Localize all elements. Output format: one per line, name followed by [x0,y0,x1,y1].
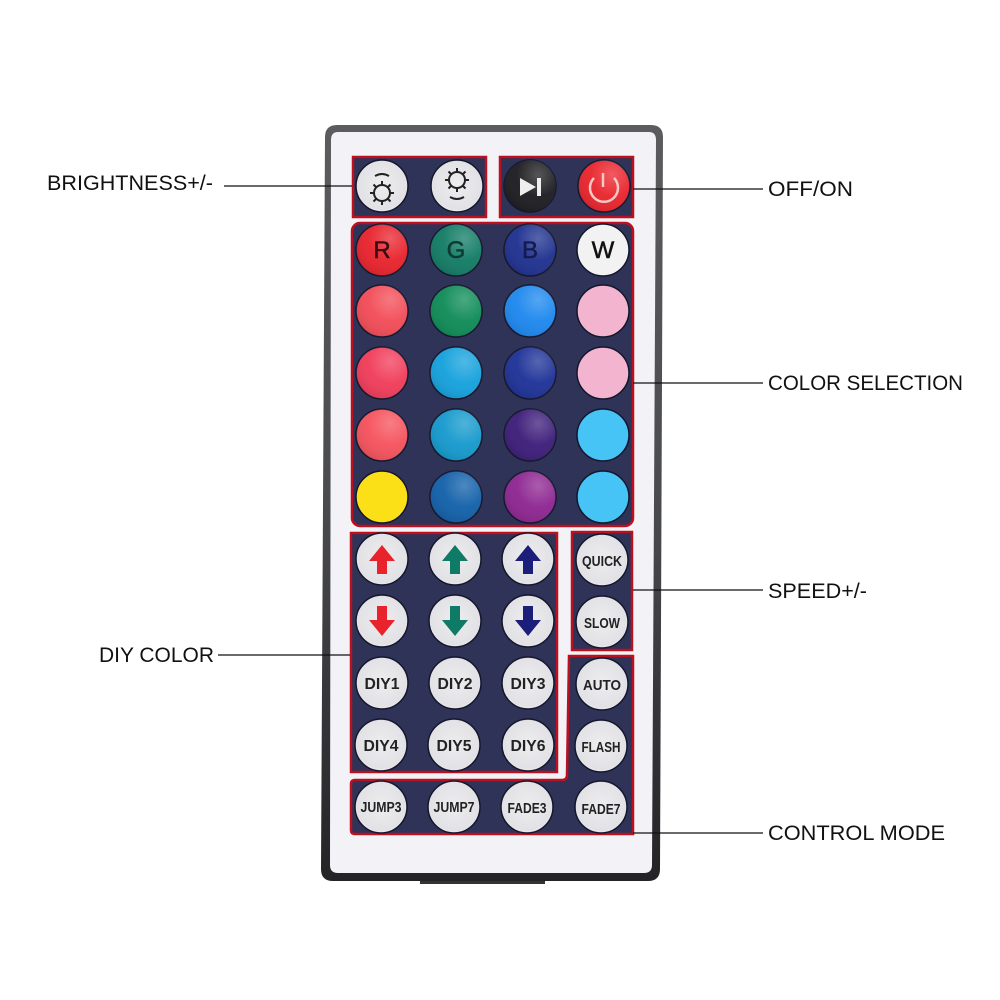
button: DIY5: DIY5 [436,738,472,755]
button: DIY4 [355,719,407,771]
panel: play and power buttons [500,157,633,217]
button: FADE3 [501,781,553,833]
color buttons grid [356,285,629,523]
label: DIY color: DIY COLOR [99,644,214,667]
button: brightness up [356,160,408,212]
button: SLOW: SLOW [584,615,621,632]
button: DIY6: DIY6 [510,738,546,755]
label: off/on: OFF/ON [768,178,853,201]
button: DIY2: DIY2 [438,676,472,693]
button: DIY1 [356,657,408,709]
button: JUMP3: JUMP3 [360,799,402,816]
button: JUMP3 [355,781,407,833]
button: AUTO [576,658,628,710]
button: JUMP7: JUMP7 [434,799,474,816]
button: FLASH [575,720,627,772]
button: FADE3: FADE3 [508,800,546,817]
label: control mode: CONTROL MODE [768,822,945,845]
panel: color selection [352,223,633,526]
panel: control mode [351,656,633,834]
button: G [430,224,482,276]
button: FADE7: FADE7 [582,801,620,818]
button: DIY6 [502,719,554,771]
button: QUICK: QUICK [582,553,622,570]
button: power [578,160,630,212]
button: red down [356,595,408,647]
button: green down [429,595,481,647]
button: B: B [522,237,538,264]
button: JUMP7 [428,781,480,833]
button: DIY3 [502,657,554,709]
panel: brightness buttons [353,157,486,217]
panel: speed [572,532,632,650]
button: blue up [502,533,554,585]
label: speed: SPEED+/- [768,580,867,603]
button: play pause [504,160,556,212]
button: R: R [373,237,391,264]
button: DIY1: DIY1 [364,676,400,693]
button: R [356,224,408,276]
button: DIY3: DIY3 [510,676,546,693]
panel: DIY color [351,533,557,772]
button: W: W [592,237,615,264]
button: DIY2 [429,657,481,709]
button: DIY4: DIY4 [364,738,399,755]
label: brightness: BRIGHTNESS+/- [47,172,213,195]
button: brightness down [431,160,483,212]
button: FLASH: FLASH [582,739,620,756]
button: DIY5 [428,719,480,771]
button: G: G [447,237,465,264]
label: color selection: COLOR SELECTION [768,372,963,395]
button: green up [429,533,481,585]
button: red up [356,533,408,585]
button: AUTO: AUTO [583,677,621,694]
button: blue down [502,595,554,647]
button: B [504,224,556,276]
button: W [577,224,629,276]
button: FADE7 [575,781,627,833]
remote control body [321,125,663,884]
